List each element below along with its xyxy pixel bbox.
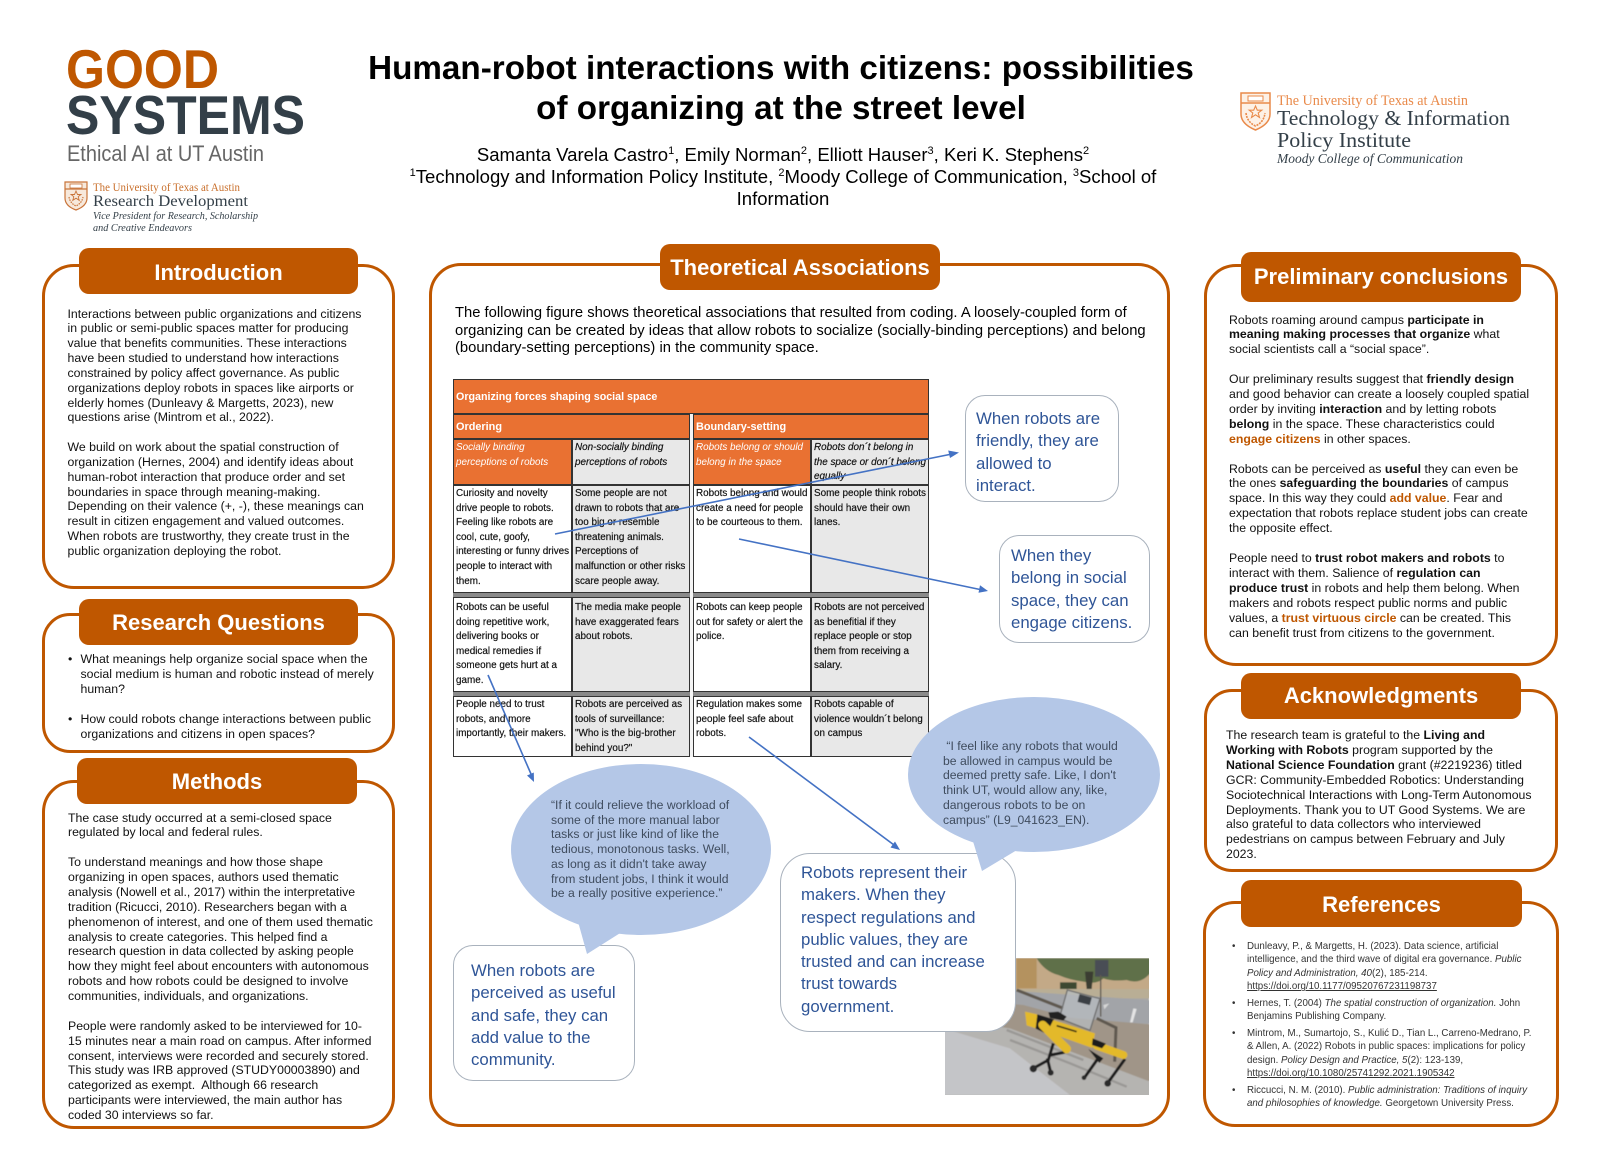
text: research questions: organizations and citizens in open spaces? xyxy=(80,727,315,741)
row 2 column 2: The media make people xyxy=(575,602,681,613)
row 2 column 2: about robots. xyxy=(575,631,633,642)
callout: belonging robots: engage citizens. xyxy=(1011,613,1132,632)
callout: belonging robots: space, they can xyxy=(1011,591,1129,610)
callout: useful and safe robots: and safe, they can xyxy=(471,1006,608,1025)
quote text: “I feel like any robots that would xyxy=(946,739,1118,753)
row 1 column 3 xyxy=(693,485,811,593)
quote text: “If it could relieve the workload of xyxy=(551,798,729,812)
row 1 column 2: threatening animals. xyxy=(575,532,664,543)
row 1 column 4: Some people think robots xyxy=(814,488,926,499)
text: research questions xyxy=(68,652,374,741)
text: introduction body: organizations deploy robots in spaces like airports or xyxy=(68,381,354,395)
logo: Good Systems: Ethical AI at UT Austin xyxy=(67,141,264,166)
reference: Hernes: • xyxy=(1232,998,1235,1009)
row 3 column 1 xyxy=(453,696,572,757)
quote text: think UT, would allow any, like, xyxy=(943,783,1107,797)
sub-heading: robots belong: Robots belong or should xyxy=(696,442,803,453)
text: introduction body: constrained by policy affect governance. As public xyxy=(68,366,339,380)
text: methods body: how they might feel about encounters with autonomous xyxy=(68,959,369,973)
text: conclusions body: meaning making processes that organize what xyxy=(1229,327,1500,341)
callout: useful and safe robots: perceived as useful xyxy=(471,983,616,1002)
row 1 cells: drive people to robots. xyxy=(456,503,554,514)
text: conclusions body: social scientists call a “social space”. xyxy=(1229,342,1429,356)
reference: Dunleavy: Policy and Administration, 40(2), 185-214. xyxy=(1247,968,1428,979)
table: organizing forces shaping social space xyxy=(453,379,929,757)
column heading: Ordering: Ordering xyxy=(456,421,502,433)
row 2 column 3: Robots can keep people xyxy=(696,602,803,613)
logo: UT Research Development xyxy=(64,181,258,234)
text: methods body: consent, interviews were recorded and securely stored. xyxy=(68,1048,369,1062)
table title: Organizing forces shaping social space xyxy=(456,391,657,403)
heading: Methods: Methods xyxy=(172,769,262,794)
callout: robots represent makers: trusted and can increase xyxy=(801,952,985,971)
text: introduction body: When robots are trustworthy, they create trust in the xyxy=(68,529,350,543)
row 1 cells: people to interact with xyxy=(456,561,552,572)
text: conclusions body: People need to trust robot makers and robots to xyxy=(1229,551,1504,565)
text: conclusions body: the ones safeguarding the boundaries of campus xyxy=(1229,476,1509,490)
callout: friendly robots: friendly, they are xyxy=(976,431,1099,450)
row 3 column 1: importantly, their makers. xyxy=(456,728,566,739)
row 1 column 2: scare people away. xyxy=(575,576,659,587)
text: conclusions body xyxy=(1229,312,1529,640)
sub-heading: socially binding xyxy=(453,439,572,485)
text: methods body: analysis (Nowell et al., 2017) within the interpretative xyxy=(68,885,355,899)
reference: Mintrom: https://doi.org/10.1080/25741292.2021.1905342 xyxy=(1247,1068,1455,1079)
text: conclusions body: space. In this way they could add value. Fear and xyxy=(1229,491,1502,505)
row 3 column 4: on campus xyxy=(814,728,862,739)
text: methods body: communities, individuals, and organizations. xyxy=(68,989,309,1003)
text: acknowledgments body: Working with Robots program supported by the xyxy=(1226,743,1493,757)
text: introduction body: human-robot interaction that produce order and set xyxy=(68,470,345,484)
quote text: be allowed in campus would be xyxy=(943,754,1112,768)
row 3 column 4: violence wouldn´t belong xyxy=(814,714,923,725)
callout: belonging robots: When they xyxy=(1011,546,1091,565)
column heading: Boundary-setting: Boundary-setting xyxy=(696,421,786,433)
row 3 column 2: behind you?" xyxy=(575,743,632,754)
logo: UT Research Development: and Creative Endeavors xyxy=(93,223,192,234)
text: acknowledgments body: also grateful to data collectors who interviewed xyxy=(1226,817,1481,831)
text: introduction body: elderly homes (Dunleavy & Margetts, 2023), new xyxy=(68,396,333,410)
arrow: row 1 boundary to belonging callout xyxy=(738,538,988,593)
text: conclusions body: Our preliminary results suggest that friendly design xyxy=(1229,372,1514,386)
quote text xyxy=(551,798,730,900)
row 2 column 1: Robots can be useful xyxy=(456,602,549,613)
logo: Technology and Information Policy Institute: Policy Institute xyxy=(1277,128,1411,152)
heading: Acknowledgments: Acknowledgments xyxy=(1284,683,1478,708)
text: conclusions body: produce trust in robots and help them belong. When xyxy=(1229,581,1520,595)
heading: Research Questions: Research Questions xyxy=(112,610,325,635)
panel: Methods xyxy=(42,758,395,1129)
sub-heading: robots do not belong: equally xyxy=(814,471,845,482)
callout: useful and safe robots: When robots are xyxy=(471,961,595,980)
text: acknowledgments body: 2023. xyxy=(1226,847,1257,861)
text: introduction body: in public or semi-public spaces matter for producing xyxy=(68,321,348,335)
text: introduction body: Depending on their valence (+, -), these meanings can xyxy=(68,499,364,513)
heading: Research Questions xyxy=(79,599,358,645)
text: acknowledgments body: Deployments. Thank you to UT Good Systems. We are xyxy=(1226,803,1525,817)
row 1 cells: them. xyxy=(456,576,481,587)
quote text: as long as it didn't take away xyxy=(551,857,706,871)
callout: useful and safe robots xyxy=(453,945,635,1081)
text: figure introduction xyxy=(455,305,1146,356)
text: introduction body: public organization deploying the robot. xyxy=(68,544,281,558)
text: figure introduction: The following figure shows theoretical associations that resulted from coding. A loosely-coupled form of xyxy=(455,305,1127,321)
sub-heading: socially binding: Socially binding xyxy=(456,442,525,453)
callout: friendly robots: When robots are xyxy=(976,409,1100,428)
text: methods body: phenomenon of interest, and one of them used thematic xyxy=(68,915,373,929)
authors and affiliations: Samanta Varela Castro1, Emily Norman2, Elliott Hauser3, Keri K. Stephens2 xyxy=(477,144,1089,165)
text: conclusions body: can benefit trust from citizens to the government. xyxy=(1229,626,1495,640)
text: methods body: robots and how robots could be designed to involve xyxy=(68,974,348,988)
text: introduction body: value that benefits communities. These interactions xyxy=(68,336,347,350)
row 2 column 1: game. xyxy=(456,675,483,686)
text: methods body: organizing in open spaces, authors used thematic xyxy=(68,870,339,884)
quote text xyxy=(943,739,1118,827)
text: introduction body: questions arise (Mintrom et al., 2022). xyxy=(68,410,274,424)
sub-heading: robots do not belong xyxy=(811,439,929,485)
text: acknowledgments body xyxy=(1226,728,1532,861)
authors and affiliations xyxy=(410,144,1156,209)
row 3 column 2: tools of surveillance: xyxy=(575,714,664,725)
quote text: campus” (L9_041623_EN). xyxy=(943,813,1089,827)
row 1 column 2 xyxy=(572,485,690,593)
row 1 column 4 xyxy=(811,485,929,593)
text: research questions: • xyxy=(68,652,72,666)
text: methods body: The case study occurred at a semi-closed space xyxy=(68,810,332,824)
row 1 column 2: drawn to robots that are xyxy=(575,503,679,514)
text: research questions: human? xyxy=(80,682,125,696)
callout: robots represent makers: trust towards xyxy=(801,974,897,993)
reference: Mintrom: Mintrom, M., Sumartojo, S., Kulić D., Tian L., Carreno-Medrano, P. xyxy=(1247,1028,1531,1039)
reference list xyxy=(1232,941,1531,1109)
heading: Methods xyxy=(77,758,357,804)
row 1 cells: interesting or funny drives xyxy=(456,546,569,557)
text: acknowledgments body: National Science Foundation grant (#2219236) titled xyxy=(1226,758,1522,772)
sub-heading: robots do not belong: Robots don´t belong in xyxy=(814,442,913,453)
text: conclusions body: order by inviting interaction and by letting robots xyxy=(1229,402,1496,416)
quote text: deemed pretty safe. Like, I don't xyxy=(943,768,1116,782)
panel: Theoretical Associations xyxy=(429,244,1170,1127)
logo: Good Systems xyxy=(66,40,305,166)
row 1 column 3: to be courteous to them. xyxy=(696,517,802,528)
text: methods body: 15 minutes near a main road on campus. After informed xyxy=(68,1034,371,1048)
row 2 column 4: Robots are not perceived xyxy=(814,602,924,613)
heading: Preliminary conclusions xyxy=(1241,252,1521,302)
text: conclusions body: belong in the space. These characteristics could xyxy=(1229,417,1495,431)
logo: Technology and Information Policy Institute: Moody College of Communication xyxy=(1276,151,1463,166)
text: methods body: This study was IRB approved (STUDY00003890) and xyxy=(68,1063,360,1077)
text: methods body: coded 30 interviews so far. xyxy=(68,1108,214,1122)
heading: References xyxy=(1241,880,1522,927)
reference: Riccucci: Riccucci, N. M. (2010). Public administration: Traditions of inquiry xyxy=(1247,1085,1527,1096)
speech bubble: safe robots quote xyxy=(908,697,1160,871)
text: research questions: How could robots change interactions between public xyxy=(80,712,371,726)
row 1 column 3: Robots belong and would xyxy=(696,488,807,499)
sub-heading: non-socially binding: perceptions of robots xyxy=(575,457,667,468)
quote text: tedious, monotonous tasks. Well, xyxy=(551,842,730,856)
panel: Research Questions xyxy=(42,599,395,753)
row 2 column 4: replace people or stop xyxy=(814,631,912,642)
row 2 column 3: out for safety or alert the xyxy=(696,617,803,628)
row 3 column 3: people feel safe about xyxy=(696,714,793,725)
row 2 column 2 xyxy=(572,597,690,692)
text: conclusions body: and good behavior can create a loosely coupled spatial xyxy=(1229,387,1529,401)
arrow: row 1 ordering to friendly callout xyxy=(554,450,959,535)
text: conclusions body: values, a trust virtuous circle can be created. This xyxy=(1229,611,1511,625)
row 2 column 3: police. xyxy=(696,631,725,642)
authors and affiliations: Information xyxy=(737,188,829,209)
row 3 column 3 xyxy=(693,696,811,757)
row 2 column 4: salary. xyxy=(814,660,842,671)
arrow: row 3 regulation to makers callout xyxy=(748,736,900,850)
text: introduction body: We build on work about the spatial construction of xyxy=(68,440,339,454)
reference: Riccucci: • xyxy=(1232,1085,1235,1096)
reference: Dunleavy: • xyxy=(1232,941,1235,952)
logo: UT Research Development: The University of Texas at Austin xyxy=(93,182,240,194)
row 3 column 3: robots. xyxy=(696,728,726,739)
row 1 column 3: create a need for people xyxy=(696,503,803,514)
row 2 column 4: as benefitial if they xyxy=(814,617,896,628)
quote text: some of the more manual labor xyxy=(551,813,720,827)
row 1 column 2: Some people are not xyxy=(575,488,667,499)
reference: Mintrom: • xyxy=(1232,1028,1235,1039)
row 2 column 1: medical remedies if xyxy=(456,646,541,657)
panel: Preliminary conclusions xyxy=(1204,252,1558,666)
quote text: dangerous robots to be on xyxy=(943,798,1085,812)
text: conclusions body: expectation that robots replace student jobs can create xyxy=(1229,506,1528,520)
text: methods body: research question in data collected by asking people xyxy=(68,944,354,958)
row 1 cells: Feeling like robots are xyxy=(456,517,553,528)
text: methods body: regulated by local and federal rules. xyxy=(68,825,263,839)
sub-heading: robots belong: belong in the space xyxy=(696,457,782,468)
row 2 column 4 xyxy=(811,597,929,692)
text: introduction body: organization (Hernes, 2004) and identify ideas about xyxy=(68,455,353,469)
heading: Preliminary conclusions: Preliminary conclusions xyxy=(1254,264,1508,289)
row 3 column 2 xyxy=(572,696,690,757)
callout: friendly robots: interact. xyxy=(976,476,1036,495)
authors and affiliations: 1Technology and Information Policy Institute, 2Moody College of Communication, 3School of xyxy=(410,166,1156,187)
callout: friendly robots xyxy=(965,395,1119,502)
quote text: be a really positive experience.” xyxy=(551,886,722,900)
heading: Introduction xyxy=(79,248,358,294)
text: introduction body: Interactions between public organizations and citizens xyxy=(68,306,361,320)
text: acknowledgments body: Sociotechnical Interactions with Long-Term Autonomous xyxy=(1226,788,1532,802)
sub-heading: socially binding: perceptions of robots xyxy=(456,457,548,468)
heading: Theoretical Associations xyxy=(660,244,940,290)
reference: Mintrom xyxy=(1232,1028,1531,1079)
logo: Technology and Information Policy Institute xyxy=(1240,92,1510,166)
reference: Hernes: Benjamins Publishing Company. xyxy=(1247,1011,1386,1022)
table title xyxy=(453,379,929,414)
reference: Dunleavy: Dunleavy, P., & Margetts, H. (2023). Data science, artificial xyxy=(1247,941,1498,952)
text: conclusions body: engage citizens in other spaces. xyxy=(1229,432,1411,446)
text: methods body: To understand meanings and how those shape xyxy=(68,855,323,869)
text: figure introduction: (boundary-setting perceptions) in the community space. xyxy=(455,340,819,356)
callout: belonging robots: belong in social xyxy=(1011,568,1127,587)
reference: Dunleavy: https://doi.org/10.1177/09520767231198737 xyxy=(1247,981,1437,992)
panel: Introduction xyxy=(42,248,395,589)
reference: Riccucci: and philosophies of knowledge. Georgetown University Press. xyxy=(1247,1098,1514,1109)
quote text: tasks or just like kind of like the xyxy=(551,827,719,841)
row 3 column 4 xyxy=(811,696,929,757)
row 1 cells: cool, cute, goofy, xyxy=(456,532,530,543)
text: methods body: participants were interviewed, the main author has xyxy=(68,1093,342,1107)
title xyxy=(368,50,1194,127)
callout: robots represent makers: makers. When they xyxy=(801,885,946,904)
text: conclusions body: Robots can be perceived as useful they can even be xyxy=(1229,462,1518,476)
callout: robots represent makers: Robots represent their xyxy=(801,863,967,882)
text: conclusions body: makers and robots respect public norms and public xyxy=(1229,596,1507,610)
row 3 column 1: robots, and more xyxy=(456,714,531,725)
row 2 column 1: someone gets hurt at a xyxy=(456,660,557,671)
logo: Technology and Information Policy Institute: Technology & Information xyxy=(1277,106,1510,130)
row 3 column 3: Regulation makes some xyxy=(696,699,802,710)
row 2 column 1 xyxy=(453,597,572,692)
reference: Riccucci xyxy=(1232,1085,1528,1109)
callout: robots represent makers xyxy=(780,853,1016,1032)
heading: Theoretical Associations: Theoretical Associations xyxy=(670,255,930,280)
arrow: row 2 ordering to quote bubble xyxy=(487,674,534,782)
panel: References xyxy=(1203,880,1559,1127)
panel: Acknowledgments xyxy=(1204,673,1558,872)
column heading: Boundary-setting xyxy=(693,414,929,439)
title: Human-robot interactions with citizens: possibilities xyxy=(368,50,1194,87)
text: research questions: • xyxy=(68,712,72,726)
title: of organizing at the street level xyxy=(536,90,1026,127)
callout: friendly robots: allowed to xyxy=(976,454,1052,473)
text: methods body: tradition (Ricucci, 2010). Researchers began with a xyxy=(68,900,347,914)
reference: Dunleavy: intelligence, and the third wave of digital era governance. Public xyxy=(1247,954,1521,965)
text: methods body: categorized as exempt. Although 66 research xyxy=(68,1078,318,1092)
text: acknowledgments body: GCR: Community-Embedded Robotics: Understanding xyxy=(1226,773,1524,787)
logo: UT Research Development: Vice President for Research, Scholarship xyxy=(93,211,258,222)
row 3 column 4: Robots capable of xyxy=(814,699,894,710)
callout: useful and safe robots: add value to the xyxy=(471,1028,590,1047)
sub-heading: robots belong xyxy=(693,439,811,485)
callout: robots represent makers: respect regulations and xyxy=(801,908,975,927)
callout: robots represent makers: government. xyxy=(801,997,894,1016)
row 2 column 3 xyxy=(693,597,811,692)
row 1 column 2: Perceptions of xyxy=(575,546,638,557)
reference: Hernes: Hernes, T. (2004) The spatial construction of organization. John xyxy=(1247,998,1520,1009)
row 1 cells: Curiosity and novelty xyxy=(456,488,548,499)
text: research questions: What meanings help organize social space when the xyxy=(80,652,368,666)
row 3 column 2: Robots are perceived as xyxy=(575,699,682,710)
row 1 cells xyxy=(453,485,572,593)
column heading: Ordering xyxy=(453,414,690,439)
text: conclusions body: interact with them. Salience of regulation can xyxy=(1229,566,1481,580)
callout: robots represent makers: public values, they are xyxy=(801,930,968,949)
row 1 column 2: too big or resemble xyxy=(575,517,660,528)
text: figure introduction: organizing can be created by ideas that allow robots to socialize (socially-binding perceptions) and belong xyxy=(455,322,1146,338)
text: conclusions body: Robots roaming around campus participate in xyxy=(1229,312,1484,326)
callout: useful and safe robots: community. xyxy=(471,1050,556,1069)
reference: Mintrom: & Allen, A. (2022) Robots in public spaces: implications for policy xyxy=(1247,1041,1525,1052)
reference: Mintrom: design. Policy Design and Practice, 5(2): 123-139, xyxy=(1247,1055,1463,1066)
logo: Technology and Information Policy Institute: The University of Texas at Austin xyxy=(1277,93,1469,109)
row 2 column 1: delivering books or xyxy=(456,631,539,642)
row 3 column 2: "Who is the big-brother xyxy=(575,728,676,739)
reference: Dunleavy xyxy=(1232,941,1522,992)
row 1 column 4: should have their own xyxy=(814,503,910,514)
text: methods body xyxy=(68,810,373,1122)
heading: Acknowledgments xyxy=(1241,673,1521,719)
sub-heading: robots do not belong: the space or don´t belong xyxy=(814,457,926,468)
photo: yellow quadruped robot on campus steps xyxy=(945,958,1149,1095)
text: introduction body xyxy=(68,306,364,558)
logo: UT Research Development: Research Development xyxy=(93,193,249,210)
heading: References: References xyxy=(1322,892,1441,916)
row 1 column 4: lanes. xyxy=(814,517,840,528)
row 3 column 1: People need to trust xyxy=(456,699,544,710)
text: acknowledgments body: pedestrians on campus between February and July xyxy=(1226,832,1505,846)
text: introduction body: have been studied to understand how interactions xyxy=(68,351,339,365)
text: introduction body: result in citizen engagement and valued outcomes. xyxy=(68,514,344,528)
reference: Hernes xyxy=(1232,998,1520,1022)
row 2 column 2: have exaggerated fears xyxy=(575,617,679,628)
sub-heading: non-socially binding xyxy=(572,439,690,485)
heading: Introduction: Introduction xyxy=(154,260,283,285)
text: acknowledgments body: The research team is grateful to the Living and xyxy=(1226,728,1485,742)
sub-heading: non-socially binding: Non-socially binding xyxy=(575,442,663,453)
text: research questions: social medium is human and robotic instead of merely xyxy=(80,667,374,681)
text: methods body: People were randomly asked to be interviewed for 10- xyxy=(68,1019,362,1033)
text: introduction body: boundaries in space through meaning-making. xyxy=(68,485,320,499)
callout: belonging robots xyxy=(999,535,1150,643)
row 2 column 4: them from receiving a xyxy=(814,646,909,657)
text: methods body: analysis to create categories. This helped find a xyxy=(68,930,328,944)
text: conclusions body: the opposite effect. xyxy=(1229,521,1333,535)
quote text: from student jobs, I think it would xyxy=(551,872,728,886)
speech bubble: relieve workload quote xyxy=(511,764,771,954)
row 1 column 2: malfunction or other risks xyxy=(575,561,685,572)
row 2 column 1: doing repetitive work, xyxy=(456,617,549,628)
